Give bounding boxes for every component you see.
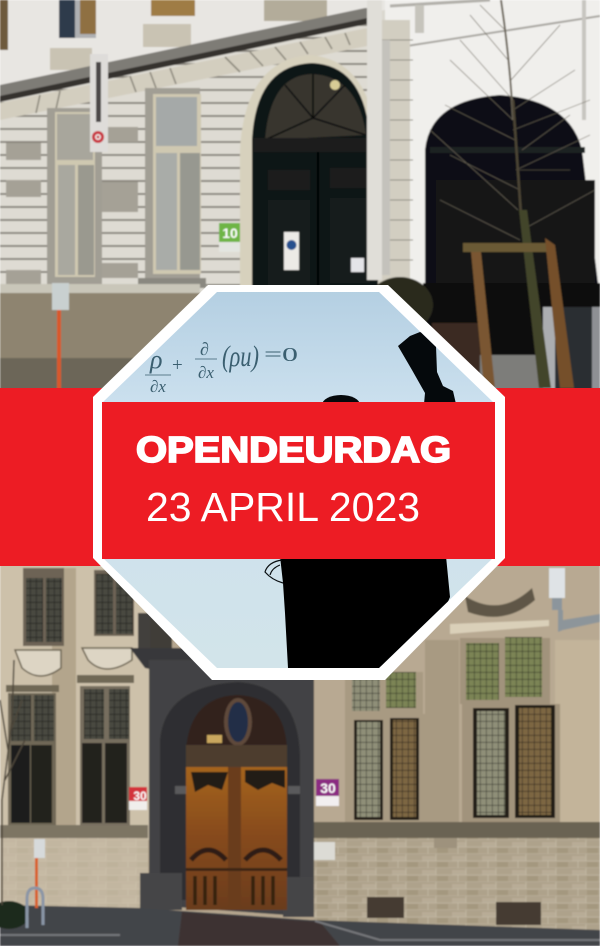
arched door — [252, 63, 379, 295]
sky background — [100, 290, 500, 670]
dark stone portal — [140, 660, 314, 917]
bare tree — [0, 660, 25, 905]
notice board — [314, 842, 335, 860]
green number sign: 10 — [222, 225, 238, 241]
bottom photo: stone facade — [0, 560, 600, 946]
shrub — [0, 901, 29, 929]
balcony — [130, 613, 200, 680]
formula: ∂x — [198, 363, 214, 382]
base wall — [0, 284, 240, 390]
planter — [432, 323, 482, 390]
ledge and base right — [314, 822, 600, 930]
lintel and garland right — [450, 588, 549, 634]
purple number sign — [316, 779, 339, 806]
rusticated wall — [0, 20, 385, 295]
stone ledge and base left — [0, 825, 148, 908]
silhouette: body — [280, 556, 450, 668]
drainpipe and quoins — [367, 0, 413, 295]
letterbox — [434, 838, 457, 848]
parking post — [34, 839, 45, 908]
right lower windows — [345, 704, 560, 822]
keystone band — [0, 28, 367, 120]
left window — [47, 108, 102, 284]
purple number sign: 30 — [320, 780, 336, 796]
white octagon frame — [93, 285, 505, 680]
cornice — [0, 8, 372, 100]
formula: (ρu) — [222, 340, 259, 373]
window sills — [40, 278, 206, 292]
wooden stakes — [463, 238, 574, 388]
formula: =0 — [264, 344, 298, 366]
vents — [367, 897, 541, 925]
lower left windows — [8, 686, 130, 826]
central window — [145, 88, 201, 278]
upper left windows — [23, 568, 134, 646]
title: OPENDEURDAG — [136, 429, 451, 470]
wooden double door — [186, 767, 287, 910]
silhouette: hair — [265, 560, 283, 583]
formula: ∂ — [200, 339, 209, 359]
tree — [430, 0, 595, 240]
grey bands — [6, 127, 138, 284]
date: 23 APRIL 2023 — [146, 484, 420, 530]
banner — [90, 54, 108, 152]
pilasters — [425, 640, 600, 825]
red title box — [102, 402, 495, 559]
bin — [543, 307, 600, 389]
silhouette: raised arm — [398, 332, 456, 404]
green number sign — [219, 223, 240, 252]
door notice — [284, 232, 299, 270]
top photo: building facade — [0, 0, 600, 395]
red band — [0, 388, 600, 566]
left pilaster — [52, 568, 76, 826]
right facade — [314, 560, 600, 840]
arched door surround — [240, 55, 378, 295]
street lamp — [549, 568, 600, 632]
silhouette: head — [323, 395, 359, 402]
right white building — [385, 0, 600, 300]
formula: ∂x — [150, 377, 166, 396]
upper storey wall — [0, 0, 385, 92]
octagon photo: student at whiteboard — [100, 290, 500, 670]
upper windows — [0, 0, 327, 70]
fanlight — [186, 695, 287, 767]
left facade — [0, 560, 150, 840]
lower left lintels — [6, 675, 134, 692]
tree trunk — [519, 210, 551, 388]
parking sign — [52, 283, 69, 390]
formula — [145, 342, 297, 392]
bike rack — [27, 888, 43, 928]
right upper windows — [345, 637, 550, 714]
pavement — [480, 355, 550, 390]
right arched door — [423, 95, 600, 395]
formula: + — [172, 355, 183, 376]
red number sign — [129, 787, 147, 810]
formula: ρ — [149, 345, 162, 374]
wet pavement — [0, 905, 600, 946]
garlands — [15, 648, 132, 676]
bush — [367, 277, 433, 333]
red number sign: 30 — [133, 789, 147, 803]
paper note — [351, 258, 364, 272]
